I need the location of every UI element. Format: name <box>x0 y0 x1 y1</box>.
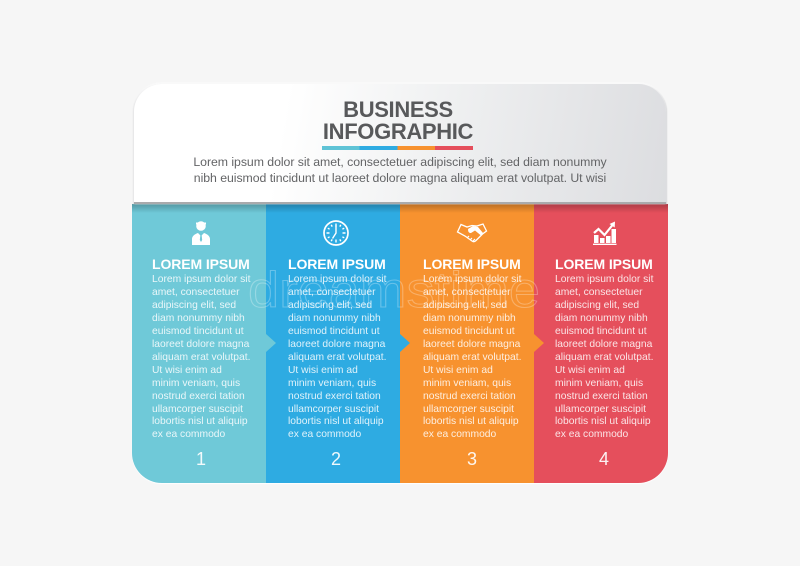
step 3 text: aliquam erat volutpat. <box>423 352 521 363</box>
step 4 heading: LOREM IPSUM <box>555 256 653 272</box>
step 3 text: amet, consectetuer <box>423 287 511 298</box>
title underline: four colours <box>322 146 473 150</box>
step 2 text: laoreet dolore magna <box>288 339 385 350</box>
step 1 text: diam nonummy nibh <box>152 313 245 324</box>
step 1 text: laoreet dolore magna <box>152 339 249 350</box>
watermark: dreamstime <box>248 262 540 318</box>
step 4 text: euismod tincidunt ut <box>555 326 647 337</box>
step 1 text: aliquam erat volutpat. <box>152 352 250 363</box>
step 1 text: Lorem ipsum dolor sit <box>152 274 250 285</box>
step 3 text: nostrud exerci tation <box>423 391 516 402</box>
title: BUSINESS <box>343 96 453 122</box>
step 4 text: amet, consectetuer <box>555 287 643 298</box>
step 4 text: ullamcorper suscipit <box>555 404 646 415</box>
step 1 text: Ut wisi enim ad <box>152 365 222 376</box>
icon: rising bar chart <box>593 222 616 245</box>
step 4 text: diam nonummy nibh <box>555 313 648 324</box>
step 2 text: minim veniam, quis <box>288 378 376 389</box>
panel: header card <box>134 84 666 204</box>
step 2 text: Lorem ipsum dolor sit <box>288 274 386 285</box>
step 4 text: Ut wisi enim ad <box>555 365 625 376</box>
step 4 text: lobortis nisl ut aliquip <box>555 416 651 427</box>
step 1 text: nostrud exerci tation <box>152 391 245 402</box>
step 3 text: lobortis nisl ut aliquip <box>423 416 519 427</box>
step 1 text: minim veniam, quis <box>152 378 240 389</box>
panel: column backgrounds <box>132 204 668 483</box>
arrow: step 1 to 2 <box>266 334 276 352</box>
step 2 text: ex ea commodo <box>288 429 361 440</box>
step 4 number: 4 <box>599 449 609 469</box>
step 1 text: ex ea commodo <box>152 429 225 440</box>
intro text: nibh euismod tincidunt ut laoreet dolore magna aliquam erat volutpat. Ut wisi <box>194 171 606 185</box>
step 1 text: adipiscing elit, sed <box>152 300 236 311</box>
step 4 text: nostrud exerci tation <box>555 391 648 402</box>
step 3 number: 3 <box>467 449 477 469</box>
step 1 text: ullamcorper suscipit <box>152 404 243 415</box>
step 4 text: adipiscing elit, sed <box>555 300 639 311</box>
step 1 text <box>152 274 250 440</box>
title: INFOGRAPHIC <box>323 118 473 144</box>
arrow: step 2 to 3 <box>400 334 410 352</box>
intro text <box>193 155 607 185</box>
step 3 text: Ut wisi enim ad <box>423 365 493 376</box>
step 4 text: minim veniam, quis <box>555 378 643 389</box>
step 3 heading: LOREM IPSUM <box>423 256 521 272</box>
step 3 text: diam nonummy nibh <box>423 313 516 324</box>
step 3 text: ullamcorper suscipit <box>423 404 514 415</box>
step 3 text: ex ea commodo <box>423 429 496 440</box>
step 1 number: 1 <box>196 449 206 469</box>
step 4 text: laoreet dolore magna <box>555 339 652 350</box>
step 2 number: 2 <box>331 449 341 469</box>
step 3 text: laoreet dolore magna <box>423 339 520 350</box>
step 2 heading: LOREM IPSUM <box>288 256 386 272</box>
intro text: Lorem ipsum dolor sit amet, consectetuer adipiscing elit, sed diam nonummy <box>193 155 607 169</box>
step 1 text: euismod tincidunt ut <box>152 326 244 337</box>
step 2 text: lobortis nisl ut aliquip <box>288 416 384 427</box>
arrow: step 3 to 4 <box>534 334 544 352</box>
step 3 text: Lorem ipsum dolor sit <box>423 274 521 285</box>
icon: clock <box>323 220 349 246</box>
step 2 text: ullamcorper suscipit <box>288 404 379 415</box>
step 2 text: amet, consectetuer <box>288 287 376 298</box>
step 2 text: euismod tincidunt ut <box>288 326 380 337</box>
step 4 text: Lorem ipsum dolor sit <box>555 274 653 285</box>
step 2 text: nostrud exerci tation <box>288 391 381 402</box>
step 3 text <box>423 274 522 440</box>
step 1 text: amet, consectetuer <box>152 287 240 298</box>
icon: handshake <box>456 223 488 242</box>
title <box>323 96 473 144</box>
icon: businessman <box>192 221 210 245</box>
step 4 text <box>555 274 654 440</box>
step 4 text: aliquam erat volutpat. <box>555 352 653 363</box>
step 4 text: ex ea commodo <box>555 429 628 440</box>
step 3 text: minim veniam, quis <box>423 378 511 389</box>
step 1 heading: LOREM IPSUM <box>152 256 250 272</box>
step 2 text <box>288 274 386 440</box>
step 1 text: lobortis nisl ut aliquip <box>152 416 248 427</box>
step 2 text: adipiscing elit, sed <box>288 300 372 311</box>
step 2 text: Ut wisi enim ad <box>288 365 358 376</box>
step 2 text: diam nonummy nibh <box>288 313 381 324</box>
step 3 text: euismod tincidunt ut <box>423 326 515 337</box>
step 3 text: adipiscing elit, sed <box>423 300 507 311</box>
step 2 text: aliquam erat volutpat. <box>288 352 386 363</box>
